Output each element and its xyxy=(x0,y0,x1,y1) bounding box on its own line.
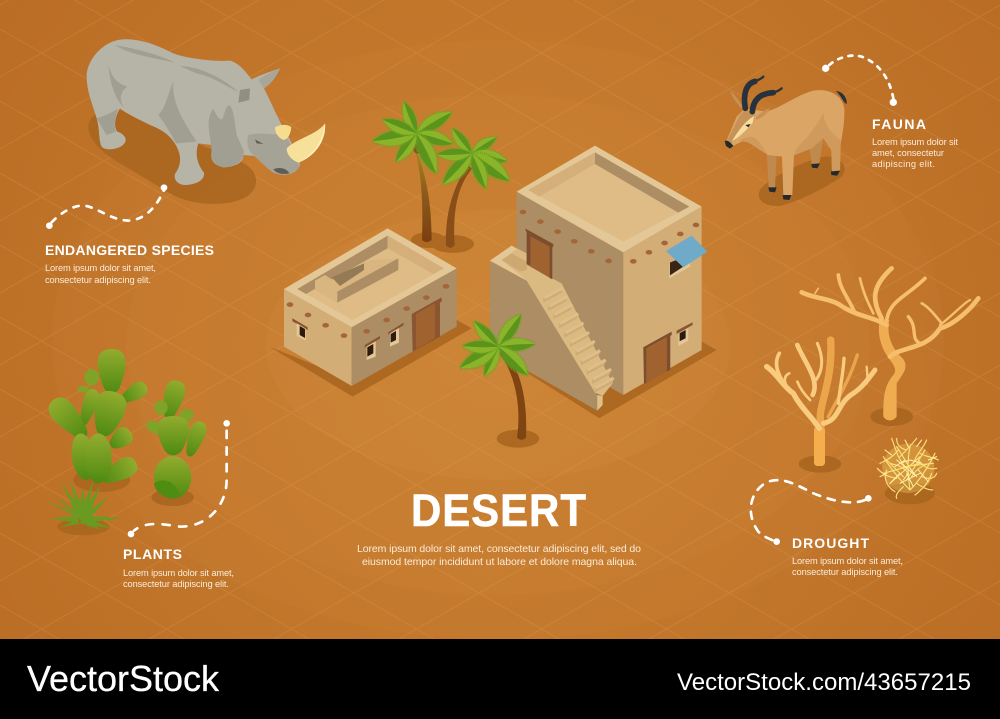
antelope shading xyxy=(740,113,841,172)
label: endangered species: ENDANGERED SPECIES xyxy=(45,242,214,258)
upper window and blue awning xyxy=(666,236,707,278)
tower right wall xyxy=(623,207,702,395)
front palm xyxy=(457,310,539,448)
roof raised L box xyxy=(315,258,398,303)
dashed route: drought xyxy=(751,480,872,545)
house left wall xyxy=(284,289,352,386)
rhino horns xyxy=(275,123,325,163)
stairs xyxy=(543,287,615,393)
label: plants xyxy=(123,546,234,589)
footer bar xyxy=(0,639,1000,719)
label: plants: consectetur adipiscing elit. xyxy=(123,579,229,589)
antelope hooves xyxy=(768,163,840,200)
small house xyxy=(269,228,472,397)
tall house shadow xyxy=(490,342,717,418)
label: endangered species xyxy=(45,242,214,285)
antelope muzzle and eye xyxy=(725,124,751,149)
rhino ear xyxy=(258,68,280,88)
label: plants: PLANTS xyxy=(123,546,182,562)
tower left wall xyxy=(517,192,623,395)
tower upper door xyxy=(525,228,553,279)
label: endangered species: consectetur adipiscing elit. xyxy=(45,275,151,285)
label: fauna: adipiscing elit. xyxy=(872,159,935,169)
palm trunk xyxy=(499,352,526,440)
house shadow xyxy=(269,320,472,397)
house door xyxy=(412,297,442,352)
dashed route: fauna xyxy=(822,56,897,106)
tower lower door xyxy=(643,332,672,383)
wall beam ends xyxy=(287,284,449,338)
label: plants: Lorem ipsum dolor sit amet, xyxy=(123,568,234,578)
tower roof xyxy=(517,146,702,252)
description xyxy=(357,543,641,568)
label: drought: consectetur adipiscing elit. xyxy=(792,567,898,577)
palm crown xyxy=(457,310,535,380)
cactus small xyxy=(144,378,209,499)
rhino face shading xyxy=(247,133,299,175)
footer brand: VectorStock xyxy=(27,658,220,699)
house right wall xyxy=(352,268,457,386)
label: drought: DROUGHT xyxy=(792,535,869,551)
label: drought: Lorem ipsum dolor sit amet, xyxy=(792,556,903,566)
house roof floor xyxy=(297,236,444,320)
antelope xyxy=(725,77,847,206)
tower small window xyxy=(677,322,693,346)
plant shadows xyxy=(57,468,194,535)
label: fauna: Lorem ipsum dolor sit xyxy=(872,137,958,147)
antelope horns xyxy=(745,77,782,112)
tower roof inner walls xyxy=(595,152,689,213)
palm trees behind houses xyxy=(371,100,515,253)
label: fauna xyxy=(872,116,958,169)
palm crown 2 xyxy=(436,125,515,191)
house roof parapet xyxy=(284,228,457,327)
label: fauna: FAUNA xyxy=(872,116,926,132)
dashed route: plants xyxy=(128,420,230,537)
agave xyxy=(44,480,122,533)
antelope shadow xyxy=(759,156,845,206)
roof inner walls xyxy=(297,236,388,294)
tumbleweed xyxy=(877,438,938,498)
palm trunk 1 xyxy=(414,145,432,242)
rhino body xyxy=(87,39,300,185)
palm crown 1 xyxy=(371,100,455,176)
tall house xyxy=(490,146,717,418)
dead tree small xyxy=(767,340,875,466)
plant shadows xyxy=(799,407,935,504)
rhino shadow xyxy=(88,110,256,204)
rhino shading xyxy=(97,45,244,167)
title: DESERT xyxy=(411,485,586,536)
label: drought xyxy=(792,535,903,577)
antelope tail xyxy=(836,91,847,104)
rhino xyxy=(87,39,325,204)
drought plants xyxy=(767,268,978,504)
antelope body xyxy=(726,90,844,195)
cactus large xyxy=(44,349,150,489)
dashed route: endangered species xyxy=(46,184,167,229)
tower beam ends xyxy=(520,210,699,264)
description: eiusmod tempor incididunt ut labore et dolore magna aliqua. xyxy=(362,556,637,568)
palm trunk 2 xyxy=(446,165,472,248)
annex top and landing xyxy=(490,246,613,396)
label: fauna: amet, consectetur xyxy=(872,148,944,158)
palm shadows xyxy=(411,232,474,253)
dead tree large xyxy=(802,268,978,420)
antelope ears xyxy=(730,91,770,119)
palm shadow xyxy=(497,430,539,448)
plants xyxy=(44,349,209,535)
description: Lorem ipsum dolor sit amet, consectetur adipiscing elit, sed do xyxy=(357,543,641,555)
footer url: VectorStock.com/43657215 xyxy=(677,669,971,696)
house windows xyxy=(292,318,404,360)
antelope face blaze xyxy=(727,108,755,144)
antelope far legs xyxy=(767,138,823,187)
tower roof floor xyxy=(528,152,689,242)
annex wall xyxy=(490,261,603,411)
label: endangered species: Lorem ipsum dolor sit amet, xyxy=(45,263,156,273)
sand contour bands xyxy=(52,40,944,640)
